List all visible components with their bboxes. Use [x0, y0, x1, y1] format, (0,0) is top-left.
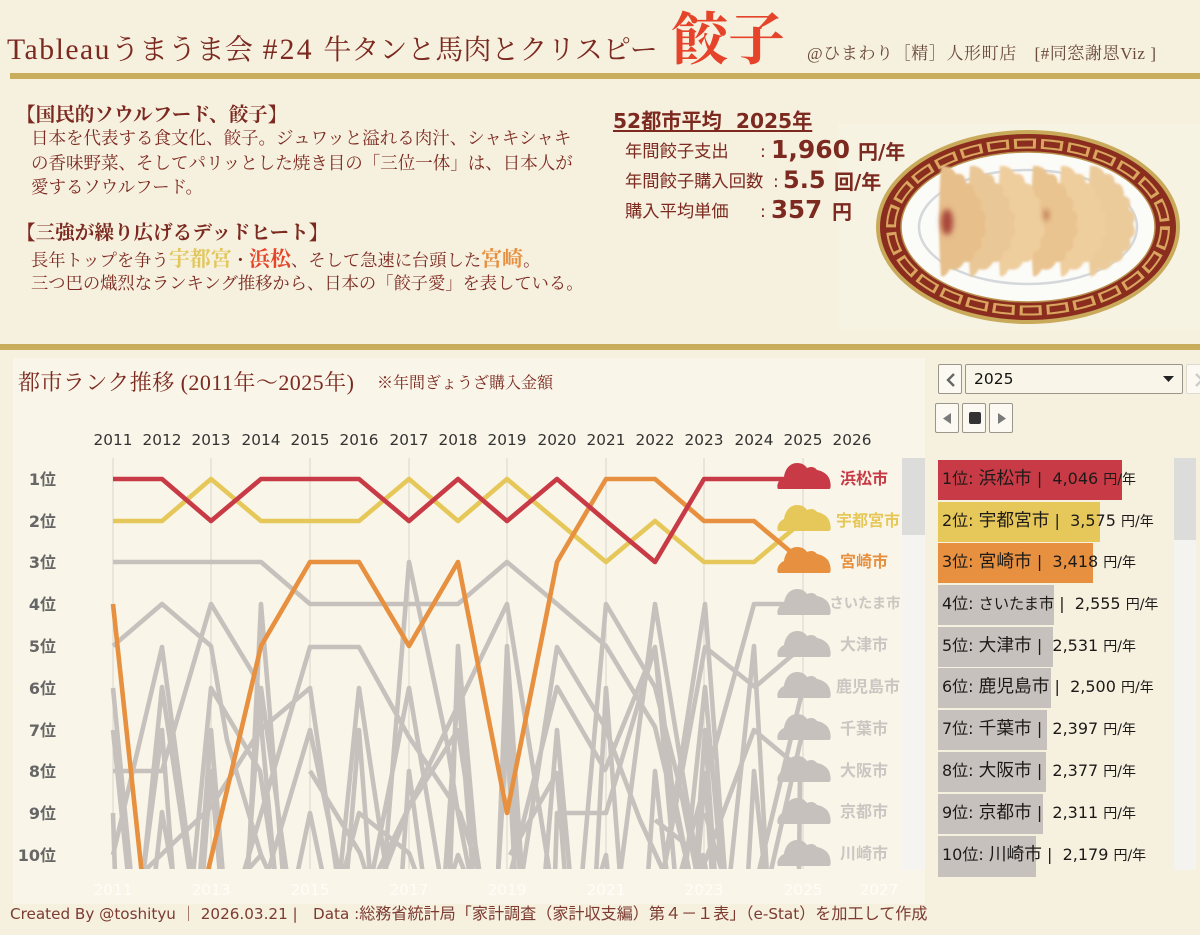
stat: average price: 357 [771, 195, 822, 224]
bar: rank 1 [938, 460, 1136, 500]
markers: other cities [777, 589, 831, 866]
year labels: top axis: 2019 [488, 431, 526, 449]
marker: Miyazaki [777, 547, 888, 573]
rank labels: y axis: 7位 [29, 721, 56, 740]
bar: rank 2 [938, 502, 1154, 542]
rank labels: y axis: 10位 [18, 846, 56, 865]
rank labels: y axis: 4位 [29, 595, 56, 614]
year labels: top axis: 2014 [242, 431, 280, 449]
body: dead heat: 長年トップを争う宇都宮・浜松、そして急速に台頭した宮崎。 [31, 247, 540, 271]
bar chart scrollbar [1174, 458, 1196, 870]
stat: purchase count: 5.5 [783, 166, 826, 194]
bar: rank 8 [938, 752, 1136, 792]
bar chart: 2025 ranking: 8位: 大阪市 | 2,377 円/年 [942, 761, 1136, 781]
bar chart: 2025 ranking: 10位: 川崎市 | 2,179 円/年 [942, 845, 1146, 865]
stat: average price: : [760, 202, 766, 222]
year labels: top axis: 2015 [291, 431, 329, 449]
year labels: top axis: 2022 [636, 431, 674, 449]
labels: other cities: さいたま市 [829, 594, 901, 612]
line: Utsunomiya [113, 479, 803, 562]
other cities lines [113, 562, 803, 875]
marker: Miyazaki: 宮崎市 [840, 552, 888, 571]
stat: annual spend: 円/年 [858, 140, 905, 164]
chart note: ※年間ぎょうざ購入金額 [377, 375, 553, 392]
year labels: top axis: 2012 [143, 431, 181, 449]
bar: rank 5 [938, 627, 1136, 667]
bar chart: 2025 ranking: 7位: 千葉市 | 2,397 円/年 [942, 719, 1136, 739]
ghost axis labels: 2021 [587, 881, 625, 899]
chart title: 都市ランク推移 (2011年～2025年) [18, 370, 354, 395]
year labels: top axis: 2011 [94, 431, 132, 449]
icon: plate with gyoza [876, 130, 1180, 324]
year labels: top axis: 2018 [439, 431, 477, 449]
rank labels: y axis: 5位 [29, 637, 56, 656]
ghost axis labels: 2025 [784, 881, 822, 899]
heading: dead heat: 【三強が繰り広げるデッドヒート】 [16, 223, 328, 244]
rank labels: y axis: 2位 [29, 512, 56, 531]
plate rim [876, 130, 1180, 324]
year dropdown [965, 364, 1183, 394]
browned spots [941, 209, 1049, 235]
marker: Hamamatsu [777, 463, 888, 489]
year labels: top axis [94, 431, 871, 449]
bar chart: 2025 ranking: 1位: 浜松市 | 4,046 円/年 [942, 469, 1136, 489]
labels: other cities: 大阪市 [840, 761, 888, 780]
labels: other cities: 川崎市 [840, 844, 888, 863]
chart scrollbar thumb [902, 458, 925, 535]
stat: annual spend: 年間餃子支出 [625, 142, 729, 162]
bar: rank 3 [938, 543, 1136, 583]
back play button [935, 403, 959, 433]
rank labels: y axis: 1位 [29, 470, 56, 489]
panel: 52-city average stats [613, 109, 905, 224]
year labels: top axis: 2026 [833, 431, 871, 449]
rank labels: y axis: 9位 [29, 804, 56, 823]
control: year selector [935, 364, 1200, 433]
stat: average price: 購入平均単価 [625, 202, 729, 222]
year labels: top axis: 2025 [784, 431, 822, 449]
year labels: top axis: 2013 [192, 431, 230, 449]
bar chart scrollbar thumb [1174, 458, 1196, 540]
text block: soul food [16, 104, 573, 197]
marker: Hamamatsu: 浜松市 [840, 469, 888, 488]
subtitle: credit: @ひまわり［精］人形町店 [#同窓謝恩Viz ] [807, 44, 1157, 63]
year dropdown: 2025 [974, 370, 1013, 388]
rank labels: y axis: 3位 [29, 553, 56, 572]
text block: dead heat [16, 222, 583, 293]
stat: average price: 円 [832, 200, 852, 224]
bar chart: 2025 ranking: 3位: 宮崎市 | 3,418 円/年 [942, 552, 1136, 572]
heading: soul food: 【国民的ソウルフード、餃子】 [16, 105, 287, 126]
ghost axis labels: 2027 [860, 881, 898, 899]
chart scrollbar [902, 458, 925, 870]
year labels: top axis: 2016 [340, 431, 378, 449]
footer: source credit: Created By @toshityu ｜ 2026.03.21 | [10, 905, 298, 923]
title: Tableauうまうま会 #24 牛タンと馬肉とクリスピー [7, 34, 658, 66]
next button (disabled) [1186, 364, 1200, 394]
bar chart: 2025 ranking: 4位: さいたま市 | 2,555 円/年 [942, 594, 1158, 613]
gyoza [939, 166, 1135, 276]
stat: purchase count: 回/年 [834, 170, 881, 194]
ghost axis labels [94, 881, 898, 899]
rank labels: y axis: 6位 [29, 679, 56, 698]
ghost axis labels: 2013 [192, 881, 230, 899]
stat: purchase count [625, 166, 881, 194]
year labels: top axis: 2024 [735, 431, 773, 449]
year labels: top axis: 2017 [390, 431, 428, 449]
rank labels: y axis: 8位 [29, 762, 56, 781]
year labels: top axis: 2020 [538, 431, 576, 449]
labels: other cities [829, 594, 901, 863]
labels: other cities: 大津市 [840, 635, 888, 654]
line: Miyazaki early [113, 604, 142, 875]
line chart: city rank trends [113, 479, 803, 875]
ghost axis labels: 2023 [685, 881, 723, 899]
body: soul food: 日本を代表する食文化、餃子。ジュワッと溢れる肉汁、シャキシャキ の香味野菜、そしてパリッとした焼き目の「三位一体」は、日本人が 愛するソウルフード。 [31, 128, 573, 197]
section divider [0, 344, 1200, 350]
body: dead heat: 三つ巴の熾烈なランキング推移から、日本の「餃子愛」を表している。 [31, 274, 583, 293]
header divider [10, 73, 1200, 79]
stat: annual spend: : [760, 142, 766, 162]
line: Miyazaki [207, 479, 803, 875]
bar: rank 4 [938, 585, 1158, 625]
bar: rank 7 [938, 710, 1136, 750]
title emphasis: gyoza: 餃子 [671, 9, 785, 72]
stat: purchase count: 年間餃子購入回数 [625, 172, 763, 192]
rank labels: y axis [18, 470, 56, 865]
bar chart: 2025 ranking: 9位: 京都市 | 2,311 円/年 [942, 803, 1136, 823]
stats heading: 52都市平均 2025年 [613, 109, 812, 133]
markers: gyoza shapes with city labels [777, 463, 901, 866]
chart panel background [13, 358, 925, 904]
line: Hamamatsu [113, 479, 803, 562]
labels: other cities: 京都市 [840, 802, 888, 821]
forward play button [989, 403, 1013, 433]
marker: Utsunomiya [777, 505, 900, 531]
ghost axis labels: 2015 [291, 881, 329, 899]
ghost axis labels: 2011 [94, 881, 132, 899]
labels: other cities: 千葉市 [840, 719, 888, 738]
ghost axis labels: 2019 [488, 881, 526, 899]
stat: annual spend: 1,960 [771, 135, 850, 164]
bar: rank 9 [938, 794, 1136, 834]
body: dead heat [31, 247, 583, 293]
labels: other cities: 鹿児島市 [836, 677, 900, 696]
footer: source credit: Data :総務省統計局「家計調査（家計収支編）第４－１表」（e-Stat）を加工して作成 [313, 904, 927, 923]
footer: source credit [10, 904, 927, 923]
bar: rank 10 [938, 836, 1146, 877]
stat: annual spend [625, 135, 905, 164]
previous button [938, 364, 962, 394]
bar chart: 2025 ranking: 6位: 鹿児島市 | 2,500 円/年 [942, 677, 1154, 697]
year labels: top axis: 2023 [685, 431, 723, 449]
bar: rank 6 [938, 668, 1154, 708]
year labels: top axis: 2021 [587, 431, 625, 449]
marker: Utsunomiya: 宇都宮市 [836, 511, 900, 530]
ghost axis labels: 2017 [390, 881, 428, 899]
stat: average price [625, 195, 852, 224]
bar chart: 2025 ranking: 5位: 大津市 | 2,531 円/年 [942, 636, 1136, 656]
stat: purchase count: : [773, 172, 779, 192]
stop button [962, 403, 986, 433]
image panel background [838, 124, 1200, 330]
bar chart: 2025 ranking: 2位: 宇都宮市 | 3,575 円/年 [942, 511, 1154, 531]
